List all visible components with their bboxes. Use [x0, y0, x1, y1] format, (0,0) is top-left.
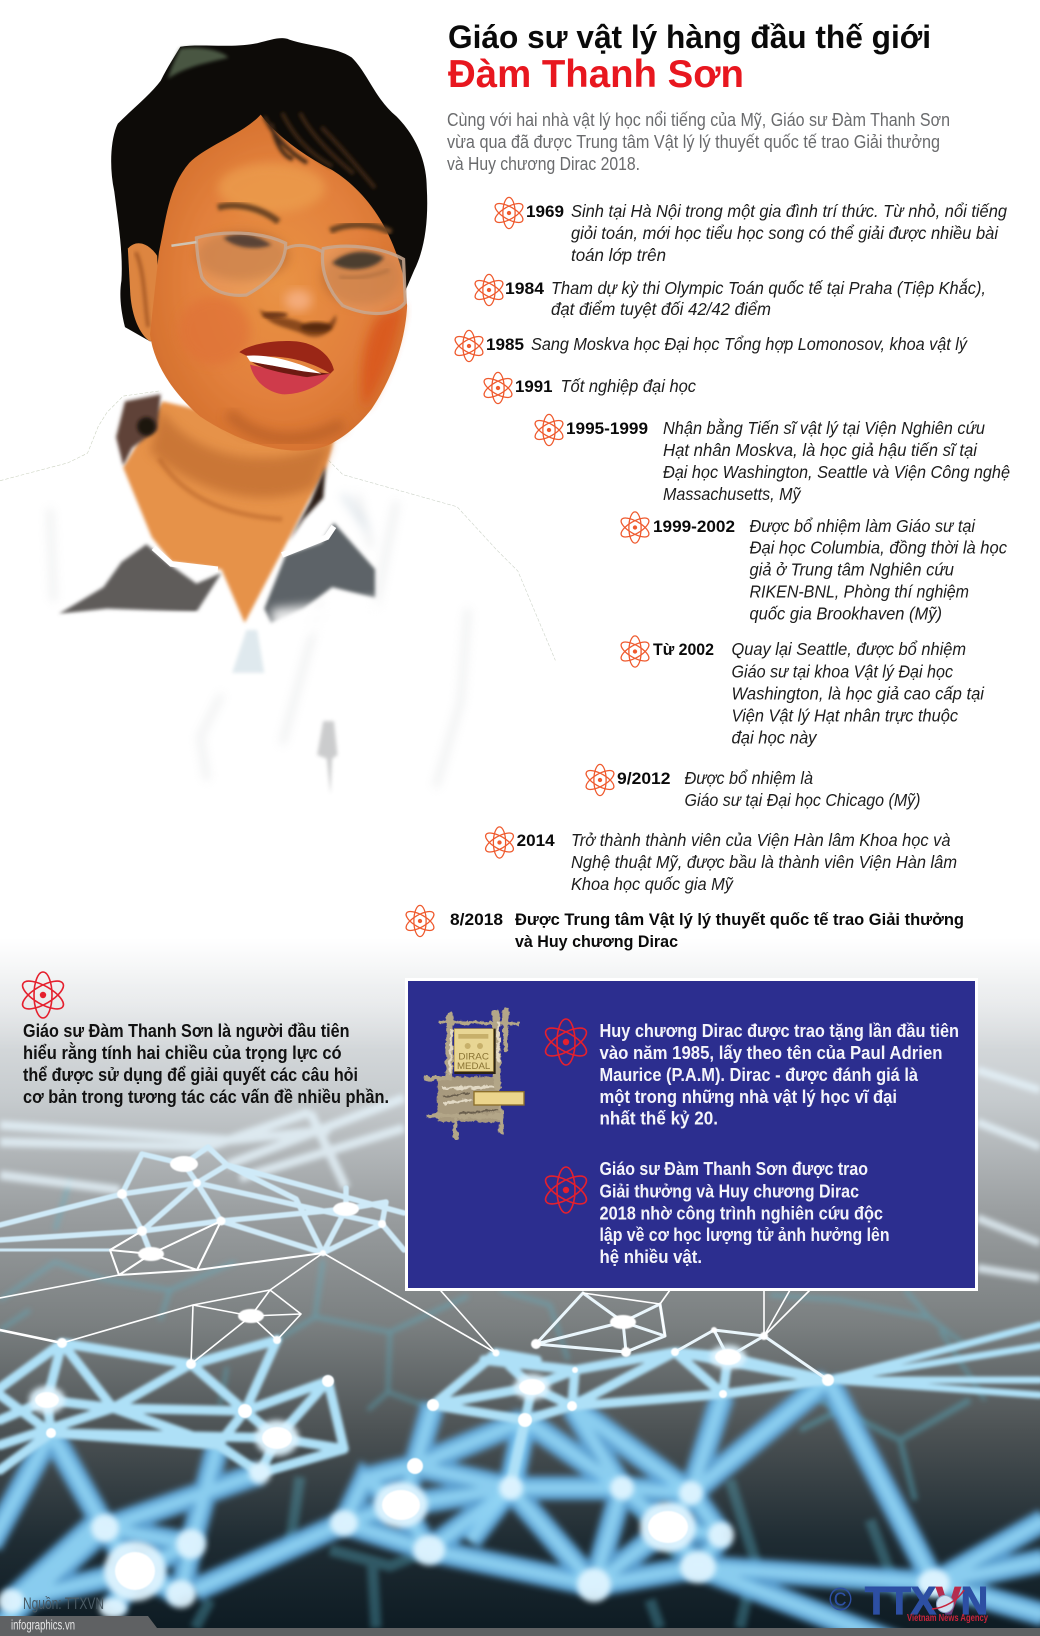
left callout: cơ bản trong tương tác các vấn đề nhiều phần.	[23, 1087, 389, 1107]
award reason block: 2018 nhờ công trình nghiên cứu độc	[600, 1204, 883, 1224]
left callout: thể được sử dụng để giải quyết các câu hỏi	[23, 1065, 358, 1085]
timeline entry 1999-2002	[618, 512, 1007, 624]
timeline entry 1984: đạt điểm tuyệt đối 42/42 điểm	[551, 299, 771, 319]
footer bar: infographics.vn	[11, 1618, 75, 1632]
timeline entry 1999-2002: giả ở Trung tâm Nghiên cứu	[750, 560, 954, 580]
timeline entry 1984	[472, 274, 986, 319]
teeth	[246, 355, 321, 374]
timeline entry 9/2012: Giáo sư tại Đại học Chicago (Mỹ)	[684, 790, 920, 810]
plaque: DIRAC	[458, 1052, 490, 1062]
timeline entry 1995-1999: Massachusetts, Mỹ	[663, 484, 802, 504]
timeline entry 1985	[452, 330, 968, 362]
background hexagon lattice	[0, 1180, 985, 1628]
timeline entry 9/2012: Được bổ nhiệm là	[684, 768, 813, 788]
timeline entry from 2002: Giáo sư tại khoa Vật lý Đại học	[732, 662, 953, 682]
timeline entry 2014: Khoa học quốc gia Mỹ	[571, 874, 734, 894]
left callout: Giáo sư Đàm Thanh Sơn là người đầu tiên	[23, 1021, 350, 1041]
icon: atom red	[542, 1167, 590, 1213]
neck	[123, 401, 334, 623]
timeline entry 1995-1999: 1995-1999	[566, 419, 648, 438]
ear	[128, 243, 161, 341]
medal history block: vào năm 1985, lấy theo tên của Paul Adrien	[600, 1043, 942, 1063]
timeline entry 1969	[492, 197, 1007, 265]
timeline entry from 2002: Từ 2002	[653, 640, 714, 659]
medal history block: một trong những nhà vật lý học vĩ đại	[600, 1087, 897, 1107]
lower lip	[250, 365, 330, 394]
timeline entry 2014	[483, 827, 957, 894]
left callout: hiểu rằng tính hai chiều của trọng lực có	[23, 1042, 342, 1063]
foreground wide blue lines	[0, 1380, 1040, 1636]
far faded network lines	[0, 1070, 1040, 1278]
title	[448, 19, 931, 96]
timeline entry 1984: Tham dự kỳ thi Olympic Toán quốc tế tại Praha (Tiệp Khắc),	[551, 278, 986, 298]
face shading	[361, 306, 404, 409]
timeline entry from 2002: Washington, là học giả cao cấp tại	[732, 684, 985, 704]
eyebrows	[218, 205, 279, 222]
upper pale blue lines	[0, 1147, 404, 1254]
left callout	[19, 972, 389, 1107]
medal history block: nhất thế kỷ 20.	[600, 1108, 718, 1128]
timeline entry 1991	[481, 372, 696, 404]
title: Giáo sư vật lý hàng đầu thế giới	[448, 19, 931, 55]
foreground line highlights	[0, 1380, 1040, 1636]
award reason block: hệ nhiều vật.	[600, 1247, 702, 1267]
timeline entry 8/2018	[403, 905, 964, 951]
timeline entry 2014: 2014	[517, 831, 555, 850]
timeline entry 9/2012: 9/2012	[617, 769, 670, 788]
timeline entry 1969: 1969	[526, 202, 564, 221]
upper lip	[239, 341, 334, 374]
timeline entry 1995-1999: Đại học Washington, Seattle và Viện Công nghệ	[663, 462, 1010, 482]
timeline entry 1995-1999: Nhận bằng Tiến sĩ vật lý tại Viện Nghiên cứu	[663, 418, 985, 438]
timeline entry from 2002	[618, 636, 985, 748]
timeline entry 1999-2002: RIKEN-BNL, Phòng thí nghiệm	[750, 582, 969, 602]
icon: atom red	[542, 1019, 590, 1065]
timeline entry 1985: Sang Moskva học Đại học Tổng hợp Lomonosov, khoa vật lý	[531, 334, 968, 354]
award reason block	[542, 1159, 890, 1267]
forehead hair strands	[264, 113, 375, 188]
timeline entry 1969: Sinh tại Hà Nội trong một gia đình trí thức. Từ nhỏ, nổi tiếng	[571, 201, 1007, 221]
medal history block: Huy chương Dirac được trao tặng lần đầu tiên	[600, 1021, 959, 1041]
logo: TTXVN: TTXVN	[865, 1580, 988, 1623]
plaque: MEDAL	[457, 1061, 490, 1071]
timeline entry 8/2018: 8/2018	[450, 910, 503, 929]
nose	[285, 290, 312, 311]
timeline entry 1985: 1985	[486, 335, 524, 354]
shirt	[0, 391, 557, 801]
button placket	[232, 630, 264, 673]
icon: atom red	[19, 972, 67, 1018]
back hair at nape	[116, 394, 161, 466]
award reason block: lập về cơ học lượng tử ảnh hưởng lên	[600, 1225, 890, 1245]
award reason block: Giải thưởng và Huy chương Dirac	[600, 1182, 859, 1202]
hair	[111, 38, 427, 341]
face	[150, 115, 407, 451]
pen in pocket	[317, 721, 337, 794]
collar shadows	[59, 544, 221, 614]
intro text: Cùng với hai nhà vật lý học nổi tiếng của Mỹ, Giáo sư Đàm Thanh Sơn	[447, 110, 950, 130]
head	[111, 38, 427, 451]
timeline	[403, 197, 1010, 951]
timeline entry 2014: Nghệ thuật Mỹ, được bầu là thành viên Viện Hàn lâm	[571, 852, 957, 872]
timeline entry 2014: Trở thành thành viên của Viện Hàn lâm Khoa học và	[571, 830, 951, 850]
white fade into page	[0, 925, 1040, 1050]
icon: Dirac medal	[426, 1010, 524, 1138]
glowing nodes	[0, 1345, 950, 1618]
collar white edge	[154, 526, 334, 569]
timeline entry 1995-1999: Hạt nhân Moskva, là học giả hậu tiến sĩ tại	[663, 440, 978, 460]
sharp white thin lines	[0, 1221, 828, 1380]
source note: Nguồn: TTXVN	[23, 1594, 104, 1613]
timeline entry 8/2018: Được Trung tâm Vật lý lý thuyết quốc tế trao Giải thưởng	[515, 910, 964, 929]
background: molecular network	[0, 925, 1040, 1636]
plaque	[454, 1029, 496, 1074]
timeline entry 9/2012	[583, 764, 920, 810]
timeline entry 8/2018: và Huy chương Dirac	[515, 932, 678, 951]
timeline entry 1999-2002: 1999-2002	[653, 517, 735, 536]
intro text: vừa qua đã được Trung tâm Vật lý lý thuyết quốc tế trao Giải thưởng	[447, 132, 940, 152]
name plate	[474, 1092, 524, 1105]
logo: TTXVN: ©	[829, 1581, 852, 1617]
timeline entry 1999-2002: Đại học Columbia, đồng thời là học	[750, 538, 1007, 558]
intro text: và Huy chương Dirac 2018.	[447, 154, 640, 174]
title: Đàm Thanh Sơn	[448, 53, 744, 96]
intro text	[447, 110, 950, 174]
eyes	[223, 234, 271, 248]
logo: TTXVN: Vietnam News Agency	[907, 1612, 988, 1624]
timeline entry 1984: 1984	[505, 279, 545, 298]
timeline entry 1995-1999	[532, 414, 1010, 504]
mouth shadow	[252, 362, 330, 377]
timeline entry 1969: toán lớp trên	[571, 245, 666, 265]
middle-depth light blue lines	[0, 1325, 1040, 1488]
timeline entry from 2002: đại học này	[732, 728, 818, 748]
timeline entry from 2002: Viện Vật lý Hạt nhân trực thuộc	[732, 706, 958, 726]
panel: Dirac medal box	[406, 980, 976, 1290]
award reason block: Giáo sư Đàm Thanh Sơn được trao	[600, 1159, 868, 1179]
medal history block: Maurice (P.A.M). Dirac - được đánh giá là	[600, 1065, 919, 1085]
timeline entry 1969: giỏi toán, mới học tiểu học song có thể giải được nhiều bài	[571, 223, 999, 243]
footer bar	[0, 1616, 1040, 1636]
timeline entry from 2002: Quay lại Seattle, được bổ nhiệm	[732, 639, 966, 659]
portrait photo	[0, 38, 557, 801]
timeline entry 1991: 1991	[515, 377, 552, 396]
glasses	[196, 233, 405, 313]
medal history block	[542, 1019, 959, 1128]
timeline entry 1991: Tốt nghiệp đại học	[560, 376, 696, 396]
timeline entry 1999-2002: Được bổ nhiệm làm Giáo sư tại	[750, 516, 976, 536]
bright node cores	[35, 1156, 834, 1590]
timeline entry 1999-2002: quốc gia Brookhaven (Mỹ)	[750, 604, 942, 624]
